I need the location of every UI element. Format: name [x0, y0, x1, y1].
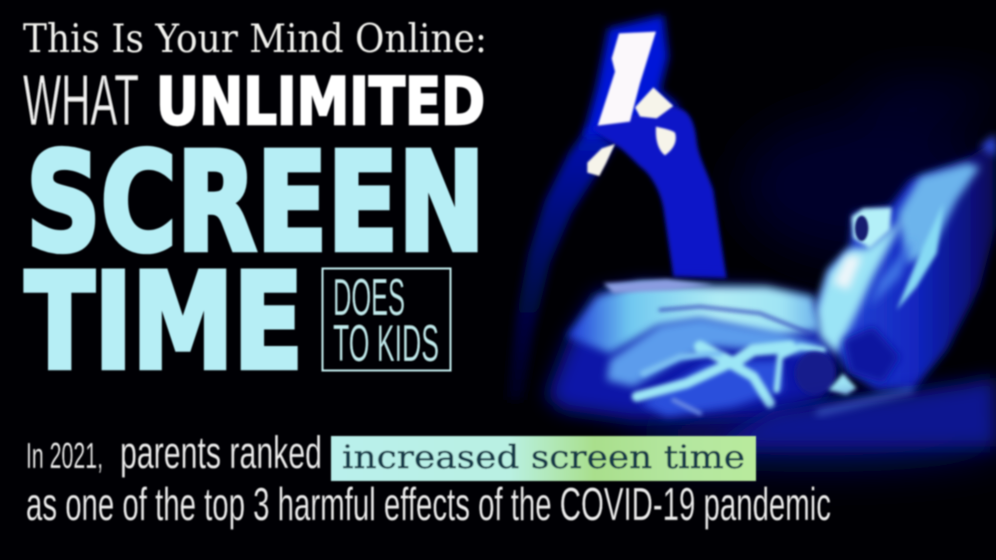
highlight box: increased screen time	[342, 438, 745, 476]
title TIME: TIME	[25, 246, 303, 400]
hand near face	[795, 352, 835, 395]
title line 2 light: WHAT	[23, 61, 139, 141]
line 1 words: parents ranked	[120, 427, 322, 478]
line 1 lead: In 2021,	[26, 435, 103, 476]
title line 2 bold: UNLIMITED	[156, 65, 485, 140]
head and pillow	[817, 133, 996, 390]
blanket	[547, 279, 857, 420]
phone screen	[598, 32, 656, 126]
bedding foreground	[713, 377, 996, 447]
photo: child in bed lit by phone	[507, 15, 996, 457]
title line 1: This Is Your Mind Online:	[23, 17, 487, 62]
right arm and hand	[592, 107, 727, 278]
left arm	[507, 127, 615, 400]
boxed label: DOES	[333, 269, 405, 327]
statistic text	[26, 427, 831, 530]
boxed label: TO KIDS	[333, 315, 439, 373]
glow: ambient navy	[630, 87, 996, 457]
title block	[23, 17, 487, 400]
phone halo	[583, 15, 680, 137]
boxed label	[322, 268, 450, 373]
fingers	[587, 87, 676, 176]
title SCREEN: SCREEN	[26, 124, 485, 282]
